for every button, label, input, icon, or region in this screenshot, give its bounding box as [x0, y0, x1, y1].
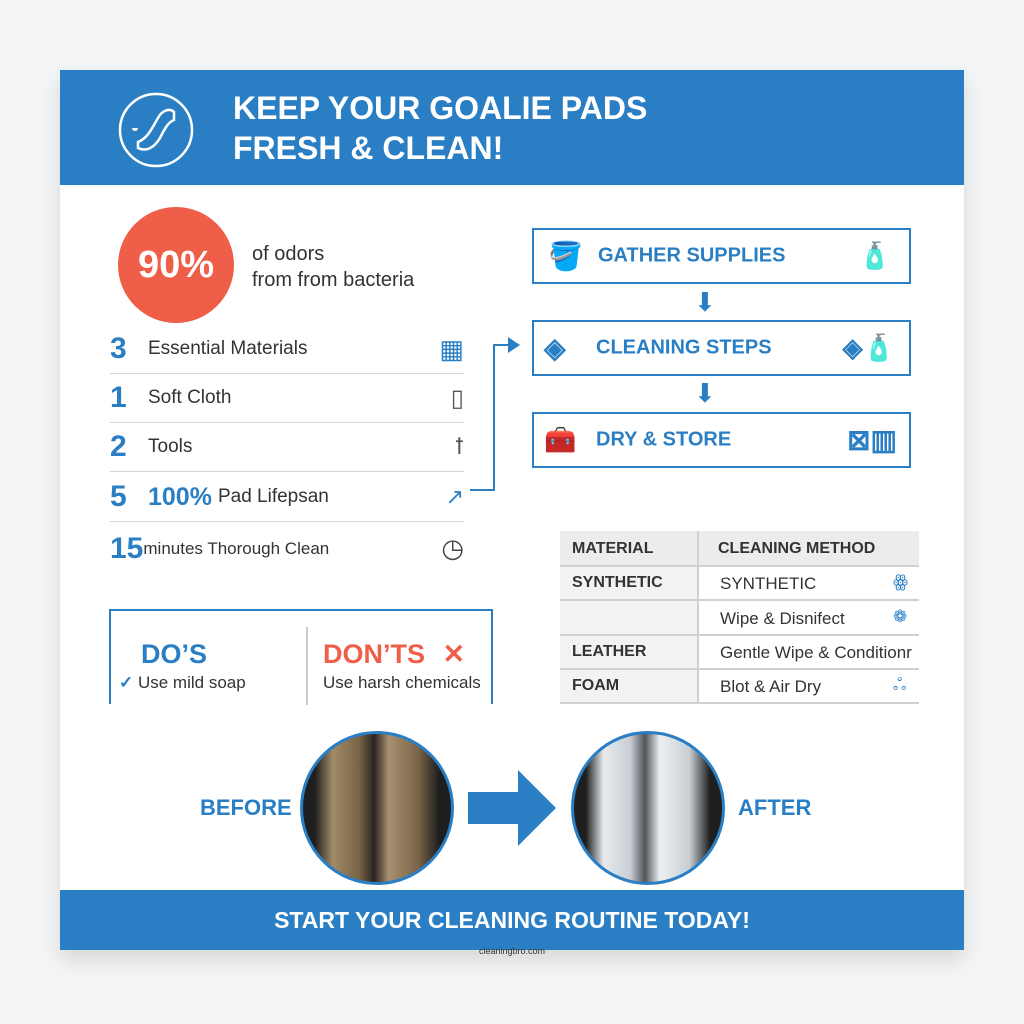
stat 90% [118, 207, 414, 323]
list of stats: ↗ [446, 484, 464, 509]
title [233, 90, 647, 166]
table: LEATHER [572, 643, 646, 660]
table: Blot & Air Dry [720, 677, 821, 696]
step: cleaning steps: ◈ [544, 332, 566, 364]
table: SYNTHETIC [572, 574, 663, 591]
list of stats: ◷ [441, 533, 464, 563]
list of stats: Soft Cloth [148, 387, 231, 408]
before photo [300, 731, 454, 885]
step: cleaning steps: ◈🧴 [843, 332, 895, 362]
list of stats: 3 [110, 332, 127, 365]
table: CLEANING METHOD [718, 540, 875, 557]
step: dry & store: 🧰 [544, 424, 576, 454]
table: Gentle Wipe & Conditionr [720, 643, 912, 662]
stat 90%: from from bacteria [252, 269, 414, 291]
icon: pad [118, 92, 194, 168]
list of stats: minutes Thorough Clean [143, 538, 329, 558]
step: cleaning steps: CLEANING STEPS [596, 336, 772, 358]
list of stats: 1 [110, 381, 127, 414]
header banner [60, 70, 964, 185]
card [60, 70, 964, 950]
footer banner: START YOUR CLEANING ROUTINE TODAY! [274, 907, 750, 933]
after label: AFTER [738, 795, 811, 820]
table: ஃ [893, 675, 906, 694]
step: gather supplies: GATHER SUPPLIES [598, 244, 785, 266]
do's and don'ts box: DON’TS ✕ [323, 639, 465, 669]
table: ꙮ [893, 572, 908, 591]
do's and don'ts box: Use harsh chemicals [323, 673, 481, 692]
after photo [571, 731, 725, 885]
table [560, 531, 919, 703]
arrow [468, 770, 556, 846]
before label: BEFORE [200, 795, 292, 820]
step: cleaning steps [532, 320, 911, 376]
step: gather supplies: 🪣 [548, 240, 583, 272]
list of stats: 2 [110, 430, 127, 463]
table: Wipe & Disnifect [720, 609, 845, 628]
list of stats [110, 332, 464, 564]
table: FOAM [572, 677, 619, 694]
do's and don'ts box: DO’S [141, 639, 207, 669]
step: dry & store: DRY & STORE [596, 428, 731, 450]
step: gather supplies: 🧴 [859, 240, 891, 270]
list of stats: Essential Materials [148, 338, 307, 359]
footer banner [60, 890, 964, 950]
table: ❁ [893, 607, 907, 626]
do's and don'ts box [109, 609, 493, 704]
list of stats: 5 [110, 480, 127, 513]
list of stats: ▯ [451, 384, 464, 412]
arrow down: ⬇ [694, 378, 716, 408]
list of stats: 100% [148, 482, 212, 510]
arrow connector [470, 337, 520, 491]
title: FRESH & CLEAN! [233, 130, 503, 166]
step: gather supplies [532, 228, 911, 284]
step: dry & store [532, 412, 911, 468]
source: cleaningbro.com [479, 946, 545, 956]
list of stats: ꝉ [455, 434, 464, 459]
do's and don'ts box: ✓ Use mild soap [119, 673, 246, 692]
arrow down: ⬇ [694, 287, 716, 317]
table: MATERIAL [572, 540, 653, 557]
step: dry & store: ⊠▥ [847, 424, 897, 456]
stat 90%: of odors [252, 243, 324, 265]
table: SYNTHETIC [720, 574, 816, 593]
stat 90%: 90% [138, 244, 214, 286]
list of stats: Pad Lifepsan [218, 486, 329, 507]
list of stats: ▦ [439, 334, 464, 364]
title: KEEP YOUR GOALIE PADS [233, 90, 647, 126]
list of stats: Tools [148, 436, 192, 457]
list of stats: 15 [110, 532, 143, 564]
